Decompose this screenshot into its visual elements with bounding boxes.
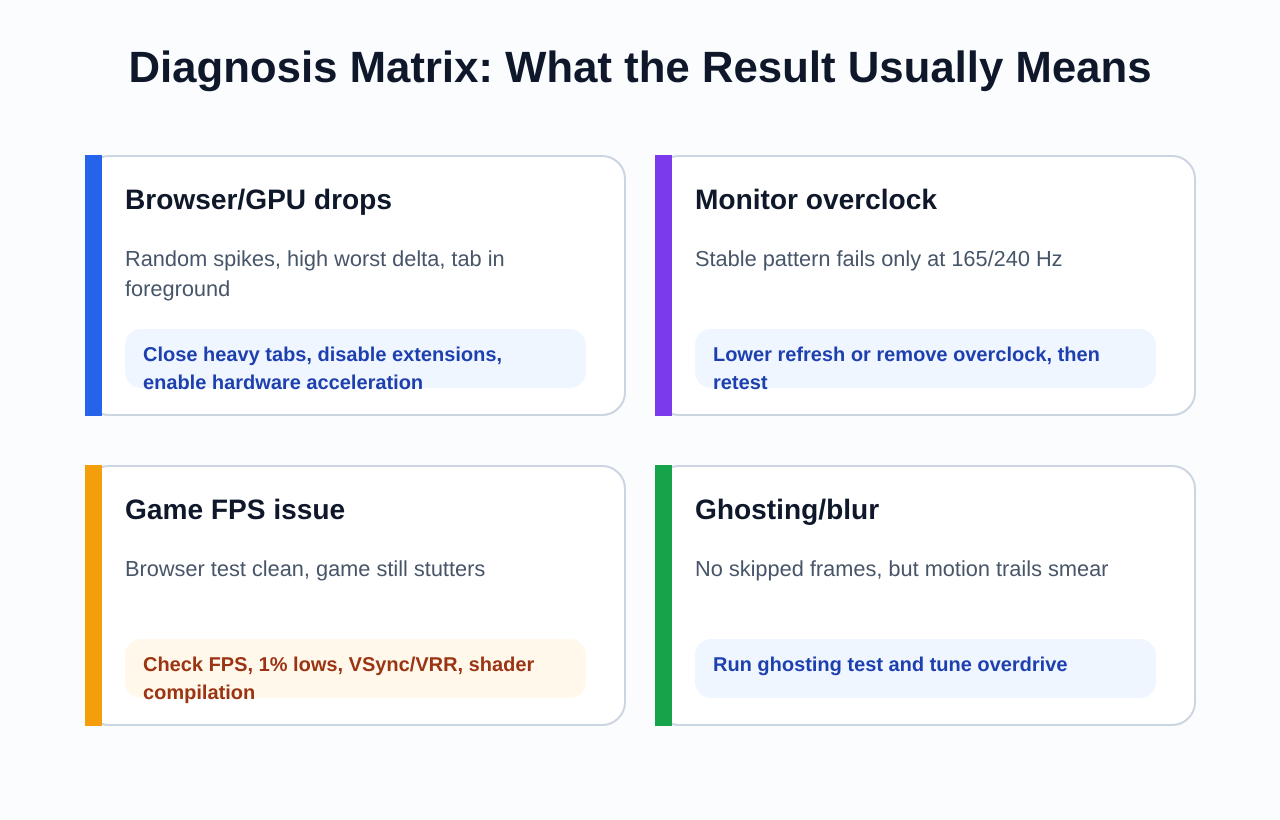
callout text: compilation: [143, 682, 255, 704]
panel: ghosting/blur: [655, 465, 1196, 726]
callout background: [695, 639, 1156, 698]
panel: game FPS issue: [85, 465, 626, 726]
callout text: Lower refresh or remove overclock, then: [713, 344, 1100, 366]
panel: browser/GPU drops: [85, 155, 626, 416]
symptom text: Browser test clean, game still stutters: [125, 556, 485, 581]
callout background: [125, 329, 586, 388]
callout text: retest: [713, 372, 767, 394]
callout text: [143, 654, 534, 704]
callout text: enable hardware acceleration: [143, 372, 423, 394]
symptom text: Random spikes, high worst delta, tab in: [125, 246, 505, 271]
title: Diagnosis Matrix: What the Result Usually Means: [128, 43, 1152, 92]
callout text: Check FPS, 1% lows, VSync/VRR, shader: [143, 654, 534, 676]
symptom text: No skipped frames, but motion trails smear: [695, 556, 1108, 581]
callout text: Run ghosting test and tune overdrive: [713, 654, 1067, 676]
symptom text: [125, 246, 505, 301]
callout text: [143, 344, 502, 394]
heading: game FPS issue: Game FPS issue: [125, 494, 345, 525]
callout text: [713, 344, 1100, 394]
callout background: [125, 639, 586, 698]
symptom text: foreground: [125, 276, 230, 301]
heading: ghosting/blur: Ghosting/blur: [695, 494, 879, 525]
callout background: [695, 329, 1156, 388]
panel: monitor overclock: [655, 155, 1196, 416]
heading: browser/GPU drops: Browser/GPU drops: [125, 184, 392, 215]
heading: monitor overclock: Monitor overclock: [695, 184, 937, 215]
callout text: Close heavy tabs, disable extensions,: [143, 344, 502, 366]
symptom text: Stable pattern fails only at 165/240 Hz: [695, 246, 1063, 271]
